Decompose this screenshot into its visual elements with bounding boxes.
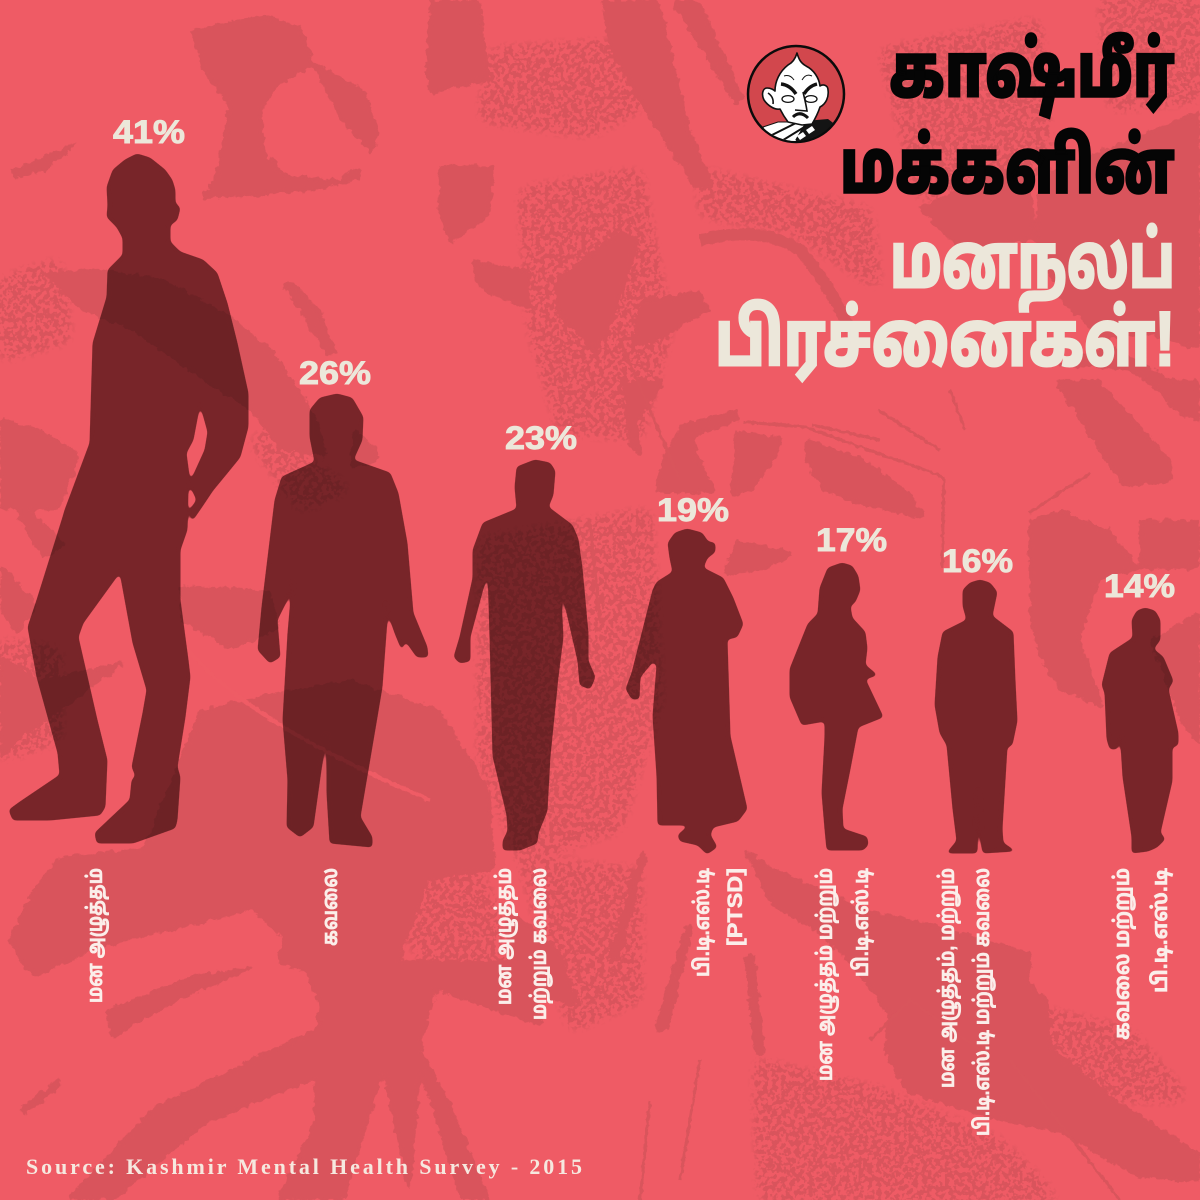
percentage labels: 19% bbox=[657, 492, 729, 528]
vertical label: depression and PTSD: மன அழுத்தம் மற்றும் bbox=[814, 868, 839, 1081]
logo: cartoon character badge bbox=[748, 46, 845, 150]
percentage labels: 26% bbox=[299, 355, 371, 391]
vertical label: depression, PTSD and anxiety: மன அழுத்தம், மற்றும் bbox=[936, 868, 961, 1088]
percentage labels: 41% bbox=[113, 114, 185, 150]
vertical label: depression and PTSD: பி.டி.எஸ்.டி bbox=[850, 868, 874, 977]
vertical label: anxiety: கவலை bbox=[319, 868, 342, 946]
vertical label: PTSD: பி.டி.எஸ்.டி bbox=[691, 868, 715, 977]
percentage labels: 23% bbox=[505, 420, 577, 456]
vertical label: PTSD bbox=[691, 868, 747, 977]
vertical label: depression: மன அழுத்தம் bbox=[84, 868, 109, 1003]
percentage labels bbox=[113, 114, 1175, 604]
vertical label: depression and anxiety: மன அழுத்தம் bbox=[493, 868, 518, 1005]
person 6: 16% bbox=[935, 580, 1017, 853]
vertical label: depression and anxiety: மற்றும் கவலை bbox=[528, 868, 553, 1020]
person 2: 26% bbox=[258, 394, 428, 847]
vertical label: anxiety and PTSD: பி.டி.எஸ்.டி bbox=[1149, 868, 1173, 993]
person 5: 17% bbox=[790, 563, 883, 850]
source line: Source: Kashmir Mental Health Survey - 2015 bbox=[26, 1154, 582, 1179]
title: cream lines bbox=[715, 219, 1175, 382]
vertical label: anxiety and PTSD: கவலை மற்றும் bbox=[1111, 868, 1136, 1040]
title: black lines bbox=[840, 29, 1175, 210]
percentage labels: 17% bbox=[816, 522, 887, 558]
person 1: 41% bbox=[9, 154, 248, 843]
percentage labels: 16% bbox=[942, 543, 1013, 579]
person 3: 23% bbox=[454, 460, 595, 850]
vertical label: depression, PTSD and anxiety: பி.டி.எஸ்.டி மற்றும் கவலை bbox=[971, 868, 996, 1136]
vertical label: depression and anxiety bbox=[493, 868, 553, 1020]
person 7: 14% bbox=[1102, 608, 1178, 853]
vertical label: depression, PTSD and anxiety bbox=[936, 868, 996, 1136]
vertical label: anxiety and PTSD bbox=[1111, 868, 1173, 1040]
vertical label: PTSD: [PTSD] bbox=[724, 868, 747, 946]
percentage labels: 14% bbox=[1104, 568, 1175, 604]
person 4: 19% bbox=[626, 529, 747, 854]
vertical label: depression and PTSD bbox=[814, 868, 874, 1081]
